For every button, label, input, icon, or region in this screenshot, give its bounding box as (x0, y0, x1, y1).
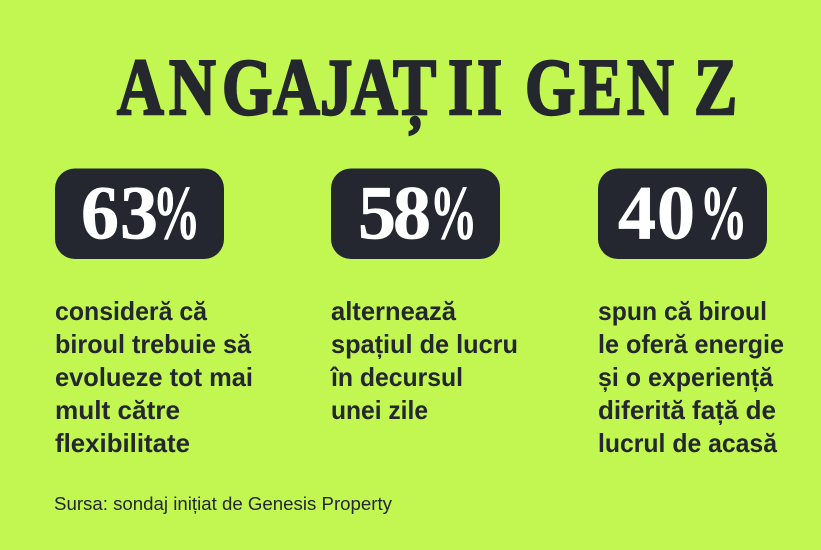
panel: 63% (55, 168, 253, 458)
text block: 63% description (55, 296, 253, 458)
text block: 40% description: și o experiență (598, 362, 774, 392)
panel: 40% (598, 168, 784, 458)
stat badge: 63%: % (153, 171, 200, 255)
text block: 58% description: unei zile (331, 395, 428, 425)
stat badge: 58%: % (430, 171, 477, 255)
stat badge: 40% (598, 168, 767, 259)
text block: 40% description: diferită față de (598, 395, 776, 425)
text block: 40% description: spun că biroul (598, 296, 767, 326)
text block: 40% description: le oferă energie (598, 329, 784, 359)
stat badge: 63% (55, 168, 224, 259)
text block: 63% description: consideră că (55, 296, 208, 326)
text block: 63% description: evolueze tot mai (55, 362, 253, 392)
text block: 58% description (329, 296, 518, 425)
stat badge: 58%: 58 (358, 172, 431, 256)
source note: Sursa: sondaj inițiat de Genesis Property (54, 494, 392, 514)
text block: 40% description (598, 296, 784, 458)
panel: 58% (329, 168, 518, 425)
text block: 40% description: lucrul de acasă (598, 428, 778, 458)
text block: 63% description: mult către (55, 395, 180, 425)
stat badge: 58% (331, 168, 500, 259)
text block: 58% description: alternează (331, 296, 457, 326)
title: ANGAJAȚII GEN Z (117, 42, 737, 135)
stat badge: 40%: % (700, 171, 747, 255)
text block: 58% description: în decursul (329, 362, 463, 392)
text block: 63% description: flexibilitate (55, 428, 190, 458)
stat badge: 40%: 40 (618, 172, 695, 256)
text block: 63% description: biroul trebuie să (55, 329, 252, 359)
text block: 58% description: spațiul de lucru (331, 329, 518, 359)
stat badge: 63%: 63 (81, 172, 158, 256)
